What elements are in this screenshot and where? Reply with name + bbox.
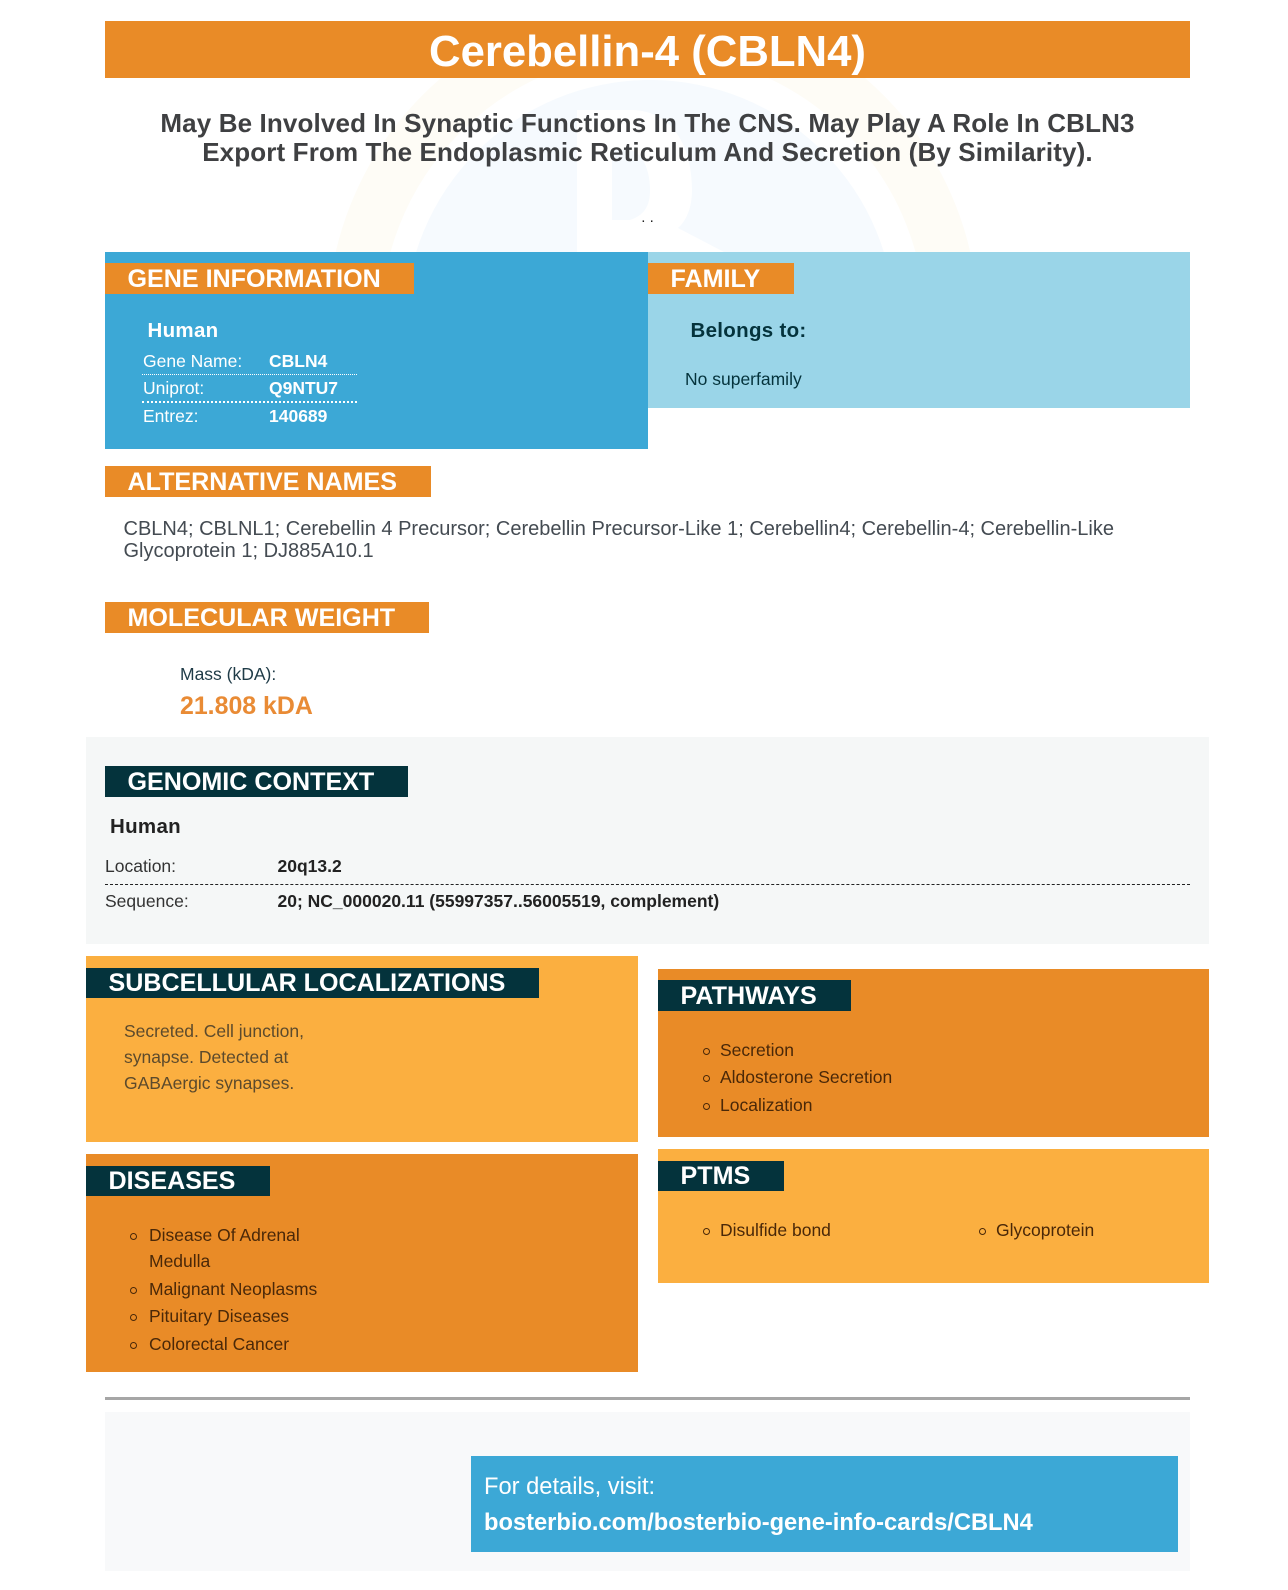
subtitle description: May Be Involved In Synaptic Functions In The CNS. May Play A Role In CBLN3 xyxy=(160,108,1135,138)
heading: diseases: DISEASES xyxy=(108,1167,235,1195)
row: uniprot: Q9NTU7 xyxy=(269,378,338,398)
heading: family xyxy=(648,263,794,294)
heading: ptms: PTMS xyxy=(680,1162,750,1190)
mass label: Mass (kDA): xyxy=(180,664,276,684)
heading: family: FAMILY xyxy=(670,265,760,293)
ptm item: Disulfide bond xyxy=(720,1220,831,1240)
callout: details link xyxy=(471,1456,1178,1552)
row: gene name: Gene Name: xyxy=(143,351,242,371)
heading: pathways xyxy=(658,980,851,1011)
row: location: 20q13.2 xyxy=(278,856,342,876)
disease item: Malignant Neoplasms xyxy=(149,1279,317,1299)
panel: ptms xyxy=(658,1149,1209,1283)
background watermark logo xyxy=(336,78,970,252)
family value: No superfamily xyxy=(685,369,802,389)
localization text: synapse. Detected at xyxy=(124,1047,288,1067)
panel: genomic context xyxy=(86,737,1209,944)
alternative names text xyxy=(124,518,1114,562)
small dots text: . . xyxy=(641,209,654,226)
title banner xyxy=(105,21,1190,78)
panel: footer xyxy=(105,1412,1190,1571)
ptm item: Glycoprotein xyxy=(996,1220,1094,1240)
heading: subcellular localizations: SUBCELLULAR LOCALIZATIONS xyxy=(108,969,505,997)
pathway item: Localization xyxy=(720,1095,812,1115)
panel: family xyxy=(648,252,1190,408)
subtitle description: Export From The Endoplasmic Reticulum And Secretion (By Similarity). xyxy=(202,137,1093,167)
row: entrez xyxy=(143,406,327,426)
callout url: bosterbio.com/bosterbio-gene-info-cards/CBLN4 xyxy=(484,1510,1033,1536)
heading: alternative names: ALTERNATIVE NAMES xyxy=(128,468,397,496)
alternative names text: Glycoprotein 1; DJ885A10.1 xyxy=(124,540,374,562)
species label: Human xyxy=(148,319,218,342)
row: gene name xyxy=(143,351,328,371)
heading: genomic context: GENOMIC CONTEXT xyxy=(128,768,374,796)
disease item: Colorectal Cancer xyxy=(149,1334,289,1354)
panel: pathways xyxy=(658,969,1209,1137)
row: entrez: Entrez: xyxy=(143,406,198,426)
row: entrez: 140689 xyxy=(269,406,327,426)
row: sequence: 20; NC_000020.11 (55997357..56005519, complement) xyxy=(278,891,719,911)
title banner: Cerebellin-4 (CBLN4) xyxy=(429,27,866,76)
panel: gene information xyxy=(105,252,648,449)
row: location: Location: xyxy=(105,856,176,876)
panel: subcellular localizations xyxy=(86,956,638,1142)
callout label: For details, visit: xyxy=(484,1474,655,1500)
heading: molecular weight: MOLECULAR WEIGHT xyxy=(128,604,395,632)
disease item: Pituitary Diseases xyxy=(149,1306,289,1326)
row: gene name: CBLN4 xyxy=(269,351,327,371)
mass value: 21.808 kDA xyxy=(180,692,313,720)
heading: ptms xyxy=(658,1161,784,1191)
disease item xyxy=(130,1225,300,1271)
disease item: Disease Of Adrenal xyxy=(149,1225,300,1245)
pathway item: Secretion xyxy=(720,1040,794,1060)
heading: pathways: PATHWAYS xyxy=(680,982,817,1010)
row: location xyxy=(105,856,342,876)
alternative names text: CBLN4; CBLNL1; Cerebellin 4 Precursor; Cerebellin Precursor-Like 1; Cerebellin4; Cerebellin-4; Cerebellin-Like xyxy=(124,518,1114,540)
localization text xyxy=(124,1021,304,1093)
molecular weight value xyxy=(180,664,313,720)
disease item: Medulla xyxy=(149,1251,210,1271)
row: uniprot: Uniprot: xyxy=(143,378,204,398)
row: sequence: Sequence: xyxy=(105,891,189,911)
panel: diseases xyxy=(86,1154,638,1372)
subtitle description xyxy=(160,108,1135,167)
row: uniprot xyxy=(143,378,338,398)
pathway item: Aldosterone Secretion xyxy=(720,1067,892,1087)
localization text: GABAergic synapses. xyxy=(124,1073,294,1093)
localization text: Secreted. Cell junction, xyxy=(124,1021,304,1041)
heading: gene information: GENE INFORMATION xyxy=(128,265,381,293)
belongs to label: Belongs to: xyxy=(690,319,807,342)
heading: diseases xyxy=(86,1166,270,1196)
species label: Human xyxy=(110,815,181,838)
